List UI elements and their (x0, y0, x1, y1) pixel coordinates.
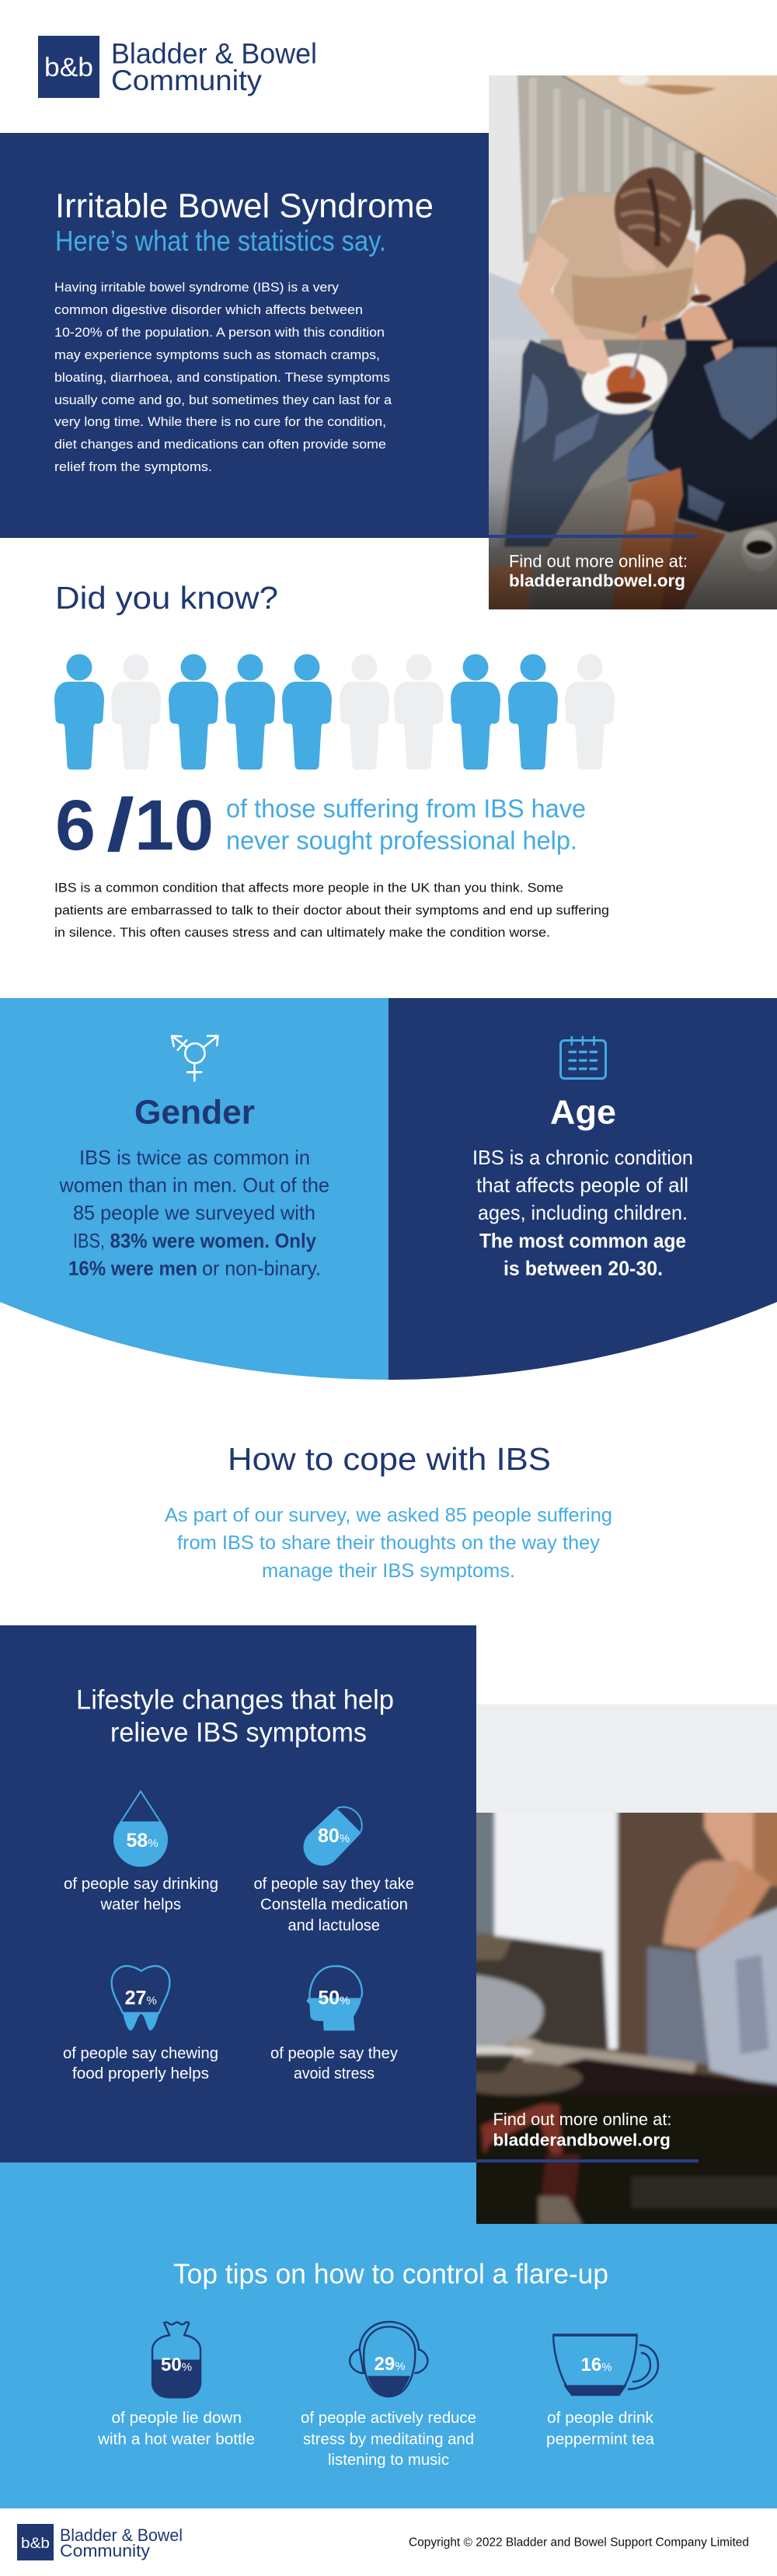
footer logo mark (17, 2524, 54, 2560)
icon: calendar (561, 1037, 606, 1079)
text: survey intro: As part of our survey, we asked 85 people suffering (165, 1505, 612, 1527)
icon: headphones 29% (350, 2322, 427, 2396)
text block: IBS is common: IBS is a common condition that affects more people in the UK than you think. Some (54, 880, 563, 895)
text: gender statistics: 83% were women. Only (110, 1229, 316, 1252)
footer wordmark: Community (60, 2541, 150, 2560)
person 2 (111, 654, 161, 770)
icon: capsule 80%: 80% (318, 1825, 350, 1847)
heading: how to cope: How to cope with IBS (228, 1441, 551, 1477)
stat caption: medication: and lactulose (287, 1917, 380, 1934)
text: gender statistics (59, 1146, 329, 1279)
text: age statistics: IBS is a chronic condition (472, 1146, 693, 1169)
stat caption: hot water bottle (97, 2410, 255, 2449)
text: gender statistics: IBS is twice as common in (79, 1146, 310, 1169)
photo: woman sitting by a window (476, 1813, 777, 2224)
text: age statistics: ages, including children. (478, 1201, 688, 1224)
person 10 (565, 654, 615, 770)
stat caption: stress (270, 2045, 398, 2082)
intro text block: may experience symptoms such as stomach cramps, (54, 347, 380, 362)
stat caption: peppermint tea: peppermint tea (546, 2431, 655, 2449)
text block: IBS is common: patients are embarrassed to talk to their doctor about their symptoms and end up suffering (54, 903, 609, 917)
intro text block: diet changes and medications can often provide some (54, 437, 386, 452)
stat caption: water: of people say drinking (64, 1876, 218, 1893)
callout: find out more online: Find out more online at: (509, 552, 688, 571)
icon: transgender symbol (172, 1036, 218, 1080)
stat caption: hot water bottle: with a hot water bottle (97, 2431, 255, 2449)
stat caption: peppermint tea (546, 2410, 655, 2449)
stat caption: meditating and music: listening to music (328, 2452, 449, 2469)
text: gender statistics: or non-binary. (202, 1256, 321, 1279)
intro text block (54, 280, 392, 474)
footer wordmark: Bladder & Bowel (60, 2525, 183, 2545)
text: gender statistics: women than in men. Out of the (59, 1174, 329, 1197)
icon: teacup 16% (552, 2335, 658, 2395)
logo: Bladder & Bowel Community (38, 36, 317, 98)
big stat: 6/10: 10 (134, 786, 214, 865)
person 8 highlighted (451, 654, 500, 770)
callout: find out more online: Find out more online at: (493, 2110, 671, 2129)
stat caption: meditating and music: stress by meditating and (303, 2431, 474, 2449)
callout: find out more online (509, 552, 688, 591)
person 5 highlighted (282, 654, 332, 770)
logo wordmark (111, 37, 317, 96)
intro text block: 10-20% of the population. A person with this condition (54, 325, 385, 340)
icon: capsule 80% (304, 1807, 362, 1866)
title: Irritable Bowel Syndrome (55, 187, 434, 225)
stat caption: stress: avoid stress (294, 2065, 375, 2082)
heading: did you know: Did you know? (55, 580, 278, 616)
text block: IBS is common: in silence. This often causes stress and can ultimately make the condition worse. (54, 925, 550, 940)
panel: age (388, 998, 777, 1380)
stat caption: never sought professional help. (226, 826, 577, 855)
person 3 highlighted (169, 654, 218, 770)
callout: find out more online (493, 2110, 671, 2150)
heading: age: Age (550, 1093, 616, 1132)
panel: intro (0, 133, 489, 538)
person 4 highlighted (225, 654, 275, 770)
stat caption: chewing: of people say chewing (63, 2045, 218, 2062)
intro text block: common digestive disorder which affects between (54, 302, 363, 317)
icon: teacup 16%: 16% (581, 2354, 612, 2375)
panel: lifestyle changes (0, 1625, 476, 2162)
divider: photo accent bar (476, 2159, 699, 2162)
intro text block: relief from the symptoms. (54, 459, 212, 474)
text: age statistics: that affects people of all (476, 1174, 688, 1197)
stat caption: stress: of people say they (270, 2045, 398, 2062)
icon: headphones 29%: 29% (375, 2354, 406, 2375)
person 7 (394, 654, 444, 770)
intro text block: Having irritable bowel syndrome (IBS) is a very (54, 280, 340, 295)
heading: lifestyle changes: Lifestyle changes that help (76, 1685, 394, 1715)
callout: find out more online: bladderandbowel.org (509, 571, 685, 591)
intro text block: bloating, diarrhoea, and constipation. These symptoms (54, 370, 390, 385)
text: survey intro (165, 1505, 612, 1582)
person 9 highlighted (508, 654, 558, 770)
heading: gender: Gender (134, 1093, 255, 1132)
text: survey intro: manage their IBS symptoms. (262, 1560, 515, 1582)
icon: hot water bottle 50%: 50% (161, 2354, 192, 2375)
heading: top tips: Top tips on how to control a flare-up (173, 2257, 608, 2290)
footer logo (17, 2524, 183, 2560)
text: age statistics (472, 1146, 693, 1279)
photo: couple eating pancakes on the floor (489, 75, 777, 609)
text: age statistics: is between 20-30. (503, 1256, 663, 1279)
divider: photo accent bar (489, 535, 697, 538)
text: gender statistics: 85 people we surveyed with (73, 1201, 315, 1224)
icon: head 50% (306, 1966, 362, 2030)
stat caption: medication: Constella medication (260, 1897, 408, 1914)
footer copyright: Copyright © 2022 Bladder and Bowel Support Company Limited (409, 2536, 749, 2550)
text: gender statistics: 16% were men (68, 1256, 197, 1279)
footer logo mark: b&b (21, 2536, 50, 2552)
text block: IBS is common (54, 880, 609, 940)
logo mark: b&b (44, 53, 93, 82)
chart: ten person pictogram, six highlighted (54, 654, 615, 770)
panel: top tips background (0, 2162, 777, 2508)
person 6 (340, 654, 389, 770)
stat caption: meditating and music: of people actively reduce (301, 2410, 476, 2427)
text: survey intro: from IBS to share their thoughts on the way they (177, 1532, 601, 1554)
logo mark (38, 36, 99, 98)
icon: tooth 27%: 27% (125, 1987, 157, 2009)
icon: tooth 27% (112, 1966, 169, 2030)
text: gender statistics: IBS, (73, 1229, 105, 1252)
stat caption: of those suffering from IBS have (226, 794, 586, 822)
stat caption: hot water bottle: of people lie down (112, 2410, 242, 2427)
subtitle: Here’s what the statistics say. (55, 225, 386, 257)
text: age statistics: The most common age (479, 1229, 686, 1252)
person 1 highlighted (54, 654, 104, 770)
stat caption: water (64, 1876, 218, 1914)
stat caption: chewing: food properly helps (72, 2065, 209, 2082)
stat caption: meditating and music (301, 2410, 476, 2469)
icon: water drop 58% (114, 1791, 167, 1866)
icon: head 50%: 50% (318, 1987, 350, 2009)
panel: gender (0, 998, 388, 1380)
heading: lifestyle changes (76, 1685, 394, 1747)
logo wordmark: Bladder & Bowel (111, 37, 317, 70)
logo wordmark: Community (111, 65, 263, 96)
big stat: 6/10: 6 (55, 786, 96, 865)
footer wordmark (60, 2525, 183, 2560)
callout: find out more online: bladderandbowel.org (493, 2130, 671, 2150)
stat caption: water: water helps (99, 1897, 181, 1914)
big stat: 6/10: / (106, 784, 134, 867)
icon: water drop 58%: 58% (126, 1830, 159, 1852)
intro text block: usually come and go, but sometimes they can last for a (54, 393, 392, 407)
heading: lifestyle changes: relieve IBS symptoms (110, 1718, 367, 1747)
stat caption: chewing (63, 2045, 218, 2082)
stat caption: medication: of people say they take (253, 1876, 414, 1893)
stat caption (226, 794, 586, 855)
big stat: 6/10 (55, 784, 214, 867)
intro text block: very long time. While there is no cure for the condition, (54, 414, 386, 429)
icon: hot water bottle 50% (152, 2322, 200, 2397)
stat caption: peppermint tea: of people drink (547, 2410, 654, 2427)
panel: grey band (476, 1704, 777, 1813)
stat caption: medication (253, 1876, 414, 1934)
